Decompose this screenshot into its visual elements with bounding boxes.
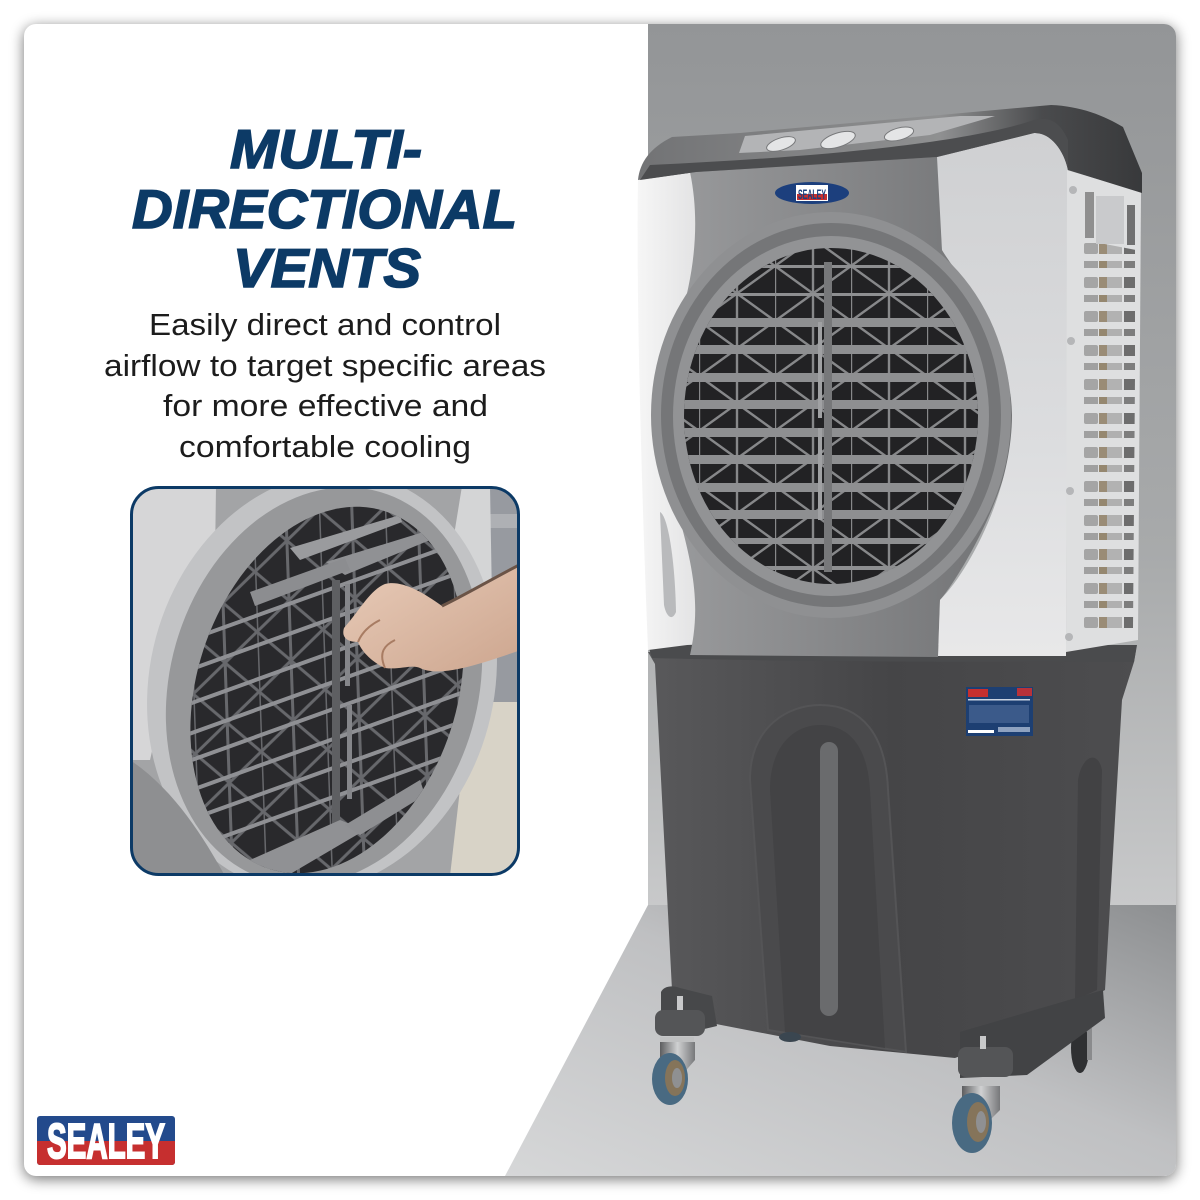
left pad — [655, 986, 717, 1036]
base and casters — [652, 986, 1105, 1153]
vent handle bars — [345, 584, 352, 799]
left white body — [638, 172, 700, 650]
inset photo: hand adjusting vents — [130, 486, 520, 876]
description text: for more effective and — [163, 388, 488, 423]
product: evaporative air cooler — [638, 105, 1142, 1153]
front left caster — [652, 1037, 695, 1105]
hand and forearm — [343, 564, 521, 671]
logo: Sealey — [37, 1115, 175, 1169]
right base plate — [960, 990, 1105, 1078]
title: MULTI- — [230, 118, 422, 180]
logo: Sealey: SEALEY — [47, 1115, 165, 1169]
front grey panel — [680, 152, 1015, 657]
badge: Sealey oval: SEALEY — [798, 186, 826, 202]
water level window — [820, 742, 838, 1016]
water gauge slot — [660, 512, 676, 617]
title: VENTS — [233, 237, 421, 299]
description text — [104, 307, 546, 464]
top cap — [638, 105, 1142, 193]
front right caster — [952, 1080, 1000, 1153]
rear caster — [1071, 1023, 1092, 1073]
right pad — [958, 1047, 1013, 1077]
description text: comfortable cooling — [179, 429, 471, 464]
vent louvres — [680, 262, 980, 572]
vent ring — [651, 212, 1011, 618]
control panel — [739, 116, 995, 153]
description text: Easily direct and control — [149, 307, 501, 342]
rear foot — [779, 1032, 801, 1042]
description text: airflow to target specific areas — [104, 348, 546, 383]
control knobs — [765, 124, 915, 154]
badge: Sealey oval — [775, 182, 849, 204]
panel: studio background — [505, 24, 1176, 1176]
title: DIRECTIONAL — [132, 178, 517, 240]
water tank — [648, 645, 1137, 1058]
title — [132, 118, 517, 299]
rating plate — [966, 687, 1033, 736]
side intake grille — [1065, 170, 1141, 652]
right white panel — [937, 133, 1068, 656]
